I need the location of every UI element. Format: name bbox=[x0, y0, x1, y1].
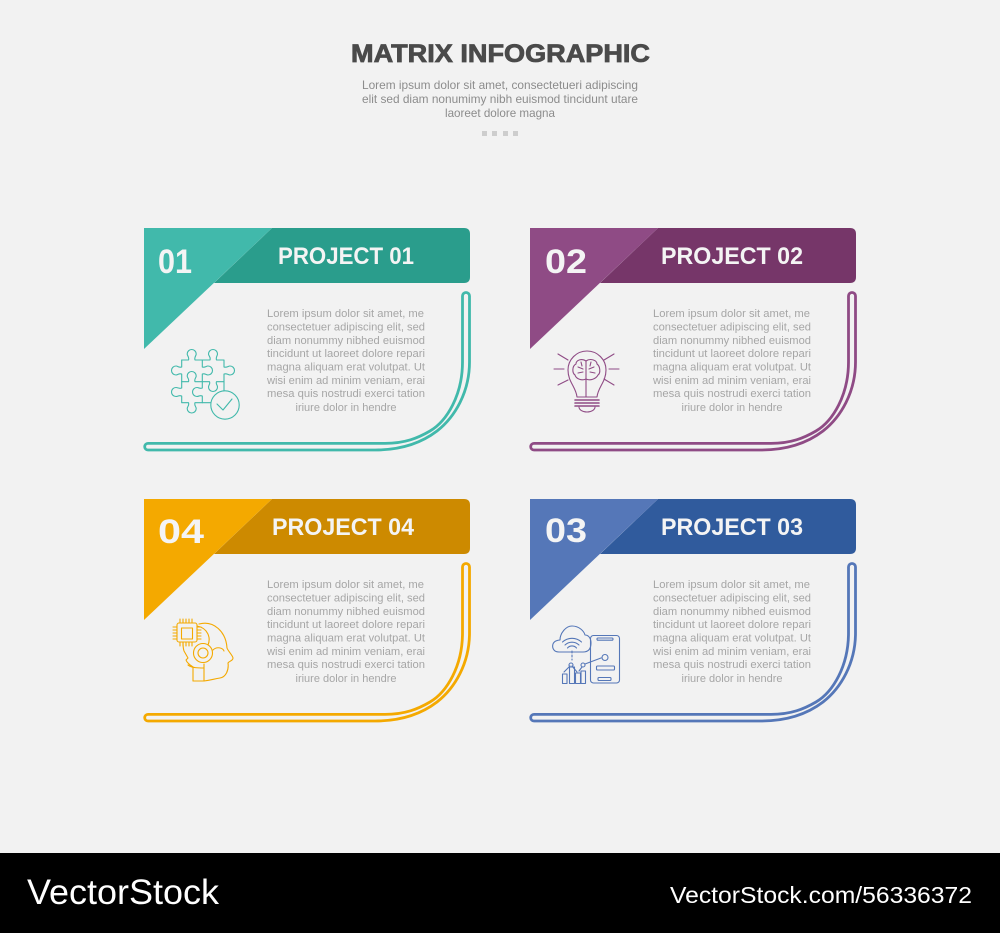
body text 02: tincidunt ut laoreet dolore repari bbox=[653, 348, 811, 360]
corner triangle 03 bbox=[530, 499, 658, 620]
body text 04: wisi enim ad minim veniam, erai bbox=[266, 646, 425, 658]
outline frame 01 bbox=[145, 293, 469, 450]
outline frame 04 bbox=[145, 564, 469, 721]
body text 01: diam nonummy nibhed euismod bbox=[267, 335, 425, 347]
body text 03: magna aliquam erat volutpat. Ut bbox=[653, 632, 812, 644]
number 03: 03 bbox=[545, 512, 587, 550]
icon: AI head with chip bbox=[173, 619, 233, 681]
heading project 02: PROJECT 02 bbox=[661, 243, 803, 270]
body text 04: tincidunt ut laoreet dolore repari bbox=[267, 619, 425, 631]
heading project 01: PROJECT 01 bbox=[278, 243, 414, 270]
body text 03: wisi enim ad minim veniam, erai bbox=[652, 646, 811, 658]
watermark band bbox=[0, 853, 1000, 933]
header bar 03 bbox=[600, 499, 856, 554]
subtitle text block: laoreet dolore magna bbox=[445, 106, 555, 120]
body text 02: diam nonummy nibhed euismod bbox=[653, 335, 811, 347]
body text 04: iriure dolor in hendre bbox=[296, 673, 396, 685]
panel: project 04 bbox=[144, 499, 470, 721]
body text 04 bbox=[266, 579, 426, 685]
body text 03: iriure dolor in hendre bbox=[682, 673, 782, 685]
panel: project 03 bbox=[530, 499, 856, 721]
body text 02: wisi enim ad minim veniam, erai bbox=[652, 375, 811, 387]
body text 03: consectetuer adipiscing elit, sed bbox=[653, 592, 811, 604]
body text 02: Lorem ipsum dolor sit amet, me bbox=[653, 308, 810, 320]
body text 02 bbox=[652, 308, 812, 414]
panel: project 01 bbox=[144, 228, 470, 450]
body text 02: mesa quis nostrudi exerci tation bbox=[653, 388, 811, 400]
watermark logo text: VectorStock bbox=[27, 873, 220, 912]
panel: project 02 bbox=[530, 228, 856, 450]
corner triangle 04 bbox=[144, 499, 272, 620]
body text 04: consectetuer adipiscing elit, sed bbox=[267, 592, 425, 604]
subtitle text block: elit sed diam nonumimy nibh euismod tincidunt utare bbox=[362, 92, 638, 106]
body text 01: Lorem ipsum dolor sit amet, me bbox=[267, 308, 424, 320]
body text 01: tincidunt ut laoreet dolore repari bbox=[267, 348, 425, 360]
number 04: 04 bbox=[158, 513, 204, 551]
header bar 02 bbox=[600, 228, 856, 283]
heading project 03: PROJECT 03 bbox=[661, 514, 803, 541]
body text 01: wisi enim ad minim veniam, erai bbox=[266, 375, 425, 387]
icon: cloud, chart and phone bbox=[553, 626, 620, 684]
subtitle text block: Lorem ipsum dolor sit amet, consectetueri adipiscing bbox=[362, 78, 638, 92]
title dots bbox=[482, 131, 518, 136]
body text 04: diam nonummy nibhed euismod bbox=[267, 606, 425, 618]
subtitle text block bbox=[362, 78, 638, 120]
body text 02: consectetuer adipiscing elit, sed bbox=[653, 322, 811, 334]
corner triangle 02 bbox=[530, 228, 658, 349]
body text 03: Lorem ipsum dolor sit amet, me bbox=[653, 579, 810, 591]
title: MATRIX INFOGRAPHIC bbox=[351, 40, 650, 68]
body text 02: magna aliquam erat volutpat. Ut bbox=[653, 362, 812, 374]
body text 04: mesa quis nostrudi exerci tation bbox=[267, 659, 425, 671]
body text 04: Lorem ipsum dolor sit amet, me bbox=[267, 579, 424, 591]
body text 01: mesa quis nostrudi exerci tation bbox=[267, 388, 425, 400]
header bar 01 bbox=[214, 228, 470, 283]
icon: puzzle with check bbox=[172, 350, 239, 419]
body text 01: consectetuer adipiscing elit, sed bbox=[267, 322, 425, 334]
outline frame 03 bbox=[531, 564, 856, 721]
header bar 04 bbox=[214, 499, 470, 554]
number 01: 01 bbox=[158, 243, 192, 281]
body text 03: diam nonummy nibhed euismod bbox=[653, 606, 811, 618]
body text 01: magna aliquam erat volutpat. Ut bbox=[267, 362, 426, 374]
heading project 04: PROJECT 04 bbox=[272, 514, 415, 541]
body text 03: mesa quis nostrudi exerci tation bbox=[653, 659, 811, 671]
corner triangle 01 bbox=[144, 228, 272, 349]
body text 04: magna aliquam erat volutpat. Ut bbox=[267, 632, 426, 644]
number 02: 02 bbox=[545, 243, 587, 281]
body text 01 bbox=[266, 308, 426, 414]
icon: light bulb with brain bbox=[554, 351, 619, 412]
body text 02: iriure dolor in hendre bbox=[682, 402, 782, 414]
body text 01: iriure dolor in hendre bbox=[296, 402, 396, 414]
watermark url text: VectorStock.com/56336372 bbox=[670, 882, 972, 908]
body text 03: tincidunt ut laoreet dolore repari bbox=[653, 619, 811, 631]
outline frame 02 bbox=[531, 293, 856, 450]
body text 03 bbox=[652, 579, 812, 685]
